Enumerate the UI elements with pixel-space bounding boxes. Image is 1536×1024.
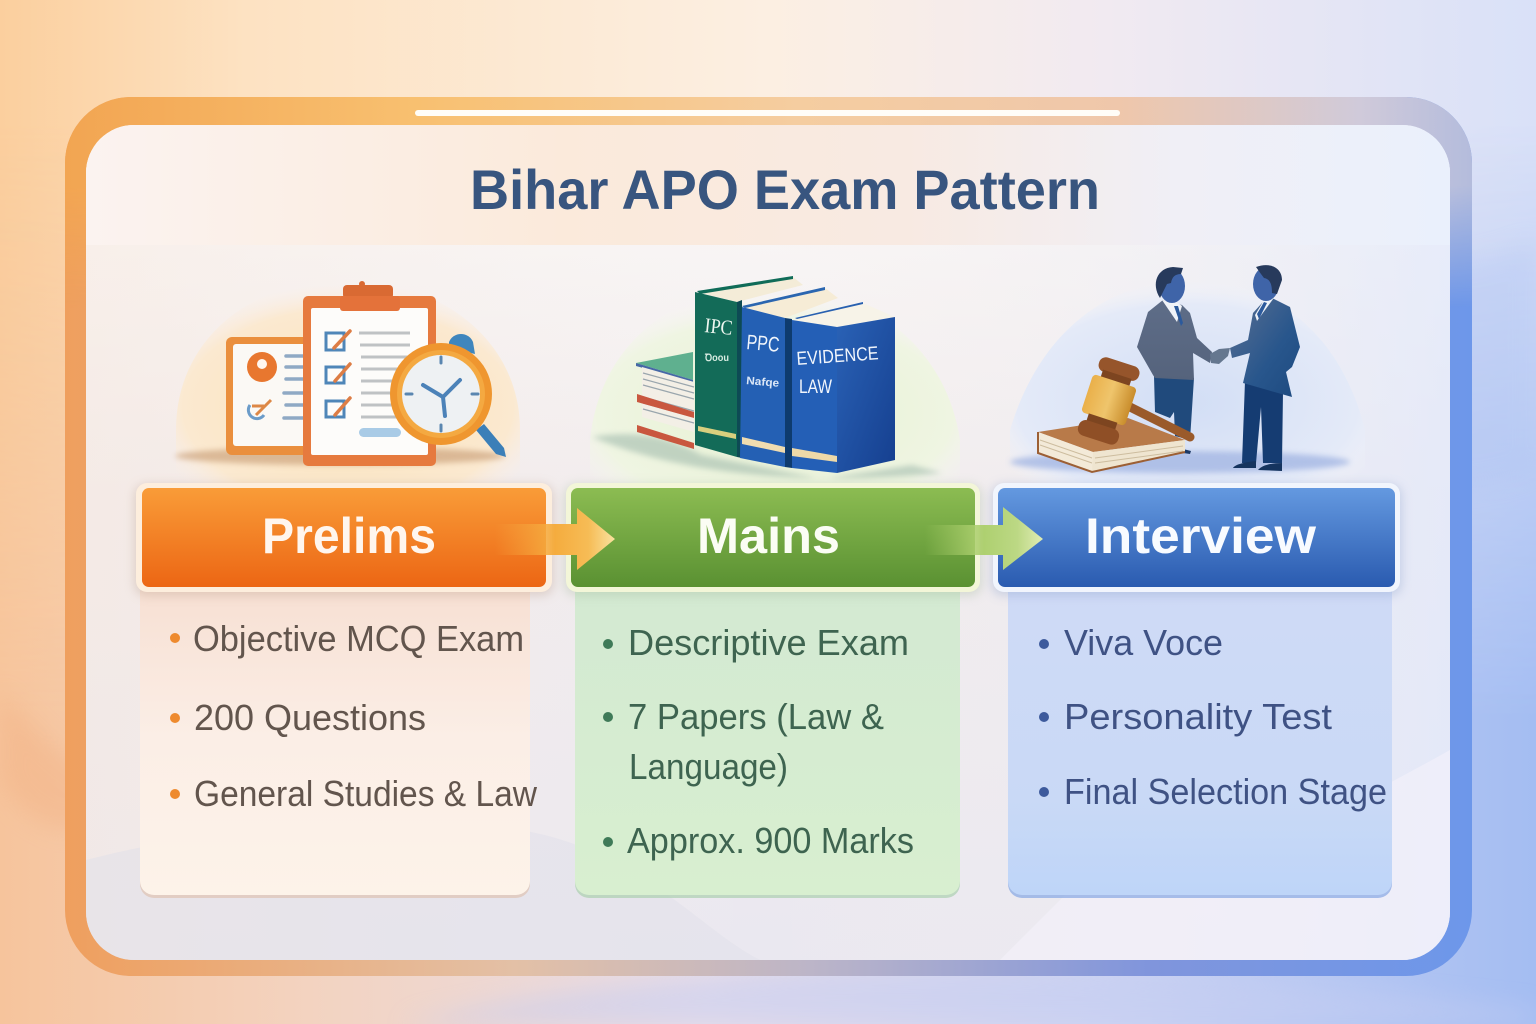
book: IPC: [695, 276, 803, 458]
book: PPC: PPC: [746, 331, 780, 357]
gavel: [1074, 355, 1190, 447]
mains list: Descriptive Exam: Descriptive Exam: [628, 622, 909, 663]
mains list: 7 Papers (Law & Language): Language): [629, 746, 788, 787]
header: Mains: Mains: [697, 508, 840, 564]
arrow: Mains to Interview: [925, 507, 1043, 570]
header: Interview: [991, 483, 1402, 596]
mains list: 7 Papers (Law & Language): 7 Papers (Law &: [628, 696, 884, 737]
mains list: 7 Papers (Law & Language): [603, 696, 884, 787]
header: Interview: Interview: [1085, 508, 1316, 564]
outer frame: [65, 97, 1472, 976]
right man: [1210, 265, 1300, 471]
inner card: [86, 125, 1450, 960]
panel: mains list: [575, 580, 960, 898]
icon: clipboard, checklist and clock: [175, 280, 520, 484]
interview list: Viva Voce: Viva Voce: [1064, 622, 1223, 663]
magnifier handle: [449, 334, 506, 457]
icon: law books: [590, 276, 960, 484]
stacked books: [636, 352, 694, 449]
header: Prelims: [134, 483, 554, 596]
book: PPC: [740, 287, 838, 468]
prelims list: 200 Questions: 200 Questions: [194, 697, 426, 738]
book: IPC: Ꝺoou: [704, 353, 729, 364]
panel: prelims list: [140, 580, 538, 898]
title: Bihar APO Exam Pattern: [470, 158, 1100, 221]
clock face: [390, 343, 492, 445]
prelims list: Objective MCQ Exam: Objective MCQ Exam: [193, 618, 524, 659]
prelims list: General Studies & Law: General Studies & Law: [194, 773, 538, 814]
book: PPC: Nafqe: [746, 375, 780, 390]
header: Prelims: Prelims: [262, 508, 436, 564]
panel: interview list: [1008, 580, 1392, 898]
interview list: Personality Test: Personality Test: [1064, 696, 1332, 737]
mains list: Approx. 900 Marks: Approx. 900 Marks: [627, 820, 914, 861]
book: Evidence Law: EVIDENCE: [796, 343, 879, 370]
book under gavel: [1038, 418, 1185, 472]
checklist boxes: [326, 331, 350, 417]
top highlight bar: [415, 110, 1120, 116]
icon: handshake and gavel: [1010, 265, 1365, 484]
book: Evidence Law: [792, 302, 895, 473]
arrow: Prelims to Mains: [495, 508, 615, 570]
book: IPC: IPC: [703, 313, 734, 340]
book: Evidence Law: LAW: [799, 377, 832, 398]
left man: [1137, 267, 1212, 454]
interview list: Final Selection Stage: Final Selection Stage: [1064, 771, 1387, 812]
header: Mains: [564, 483, 982, 596]
